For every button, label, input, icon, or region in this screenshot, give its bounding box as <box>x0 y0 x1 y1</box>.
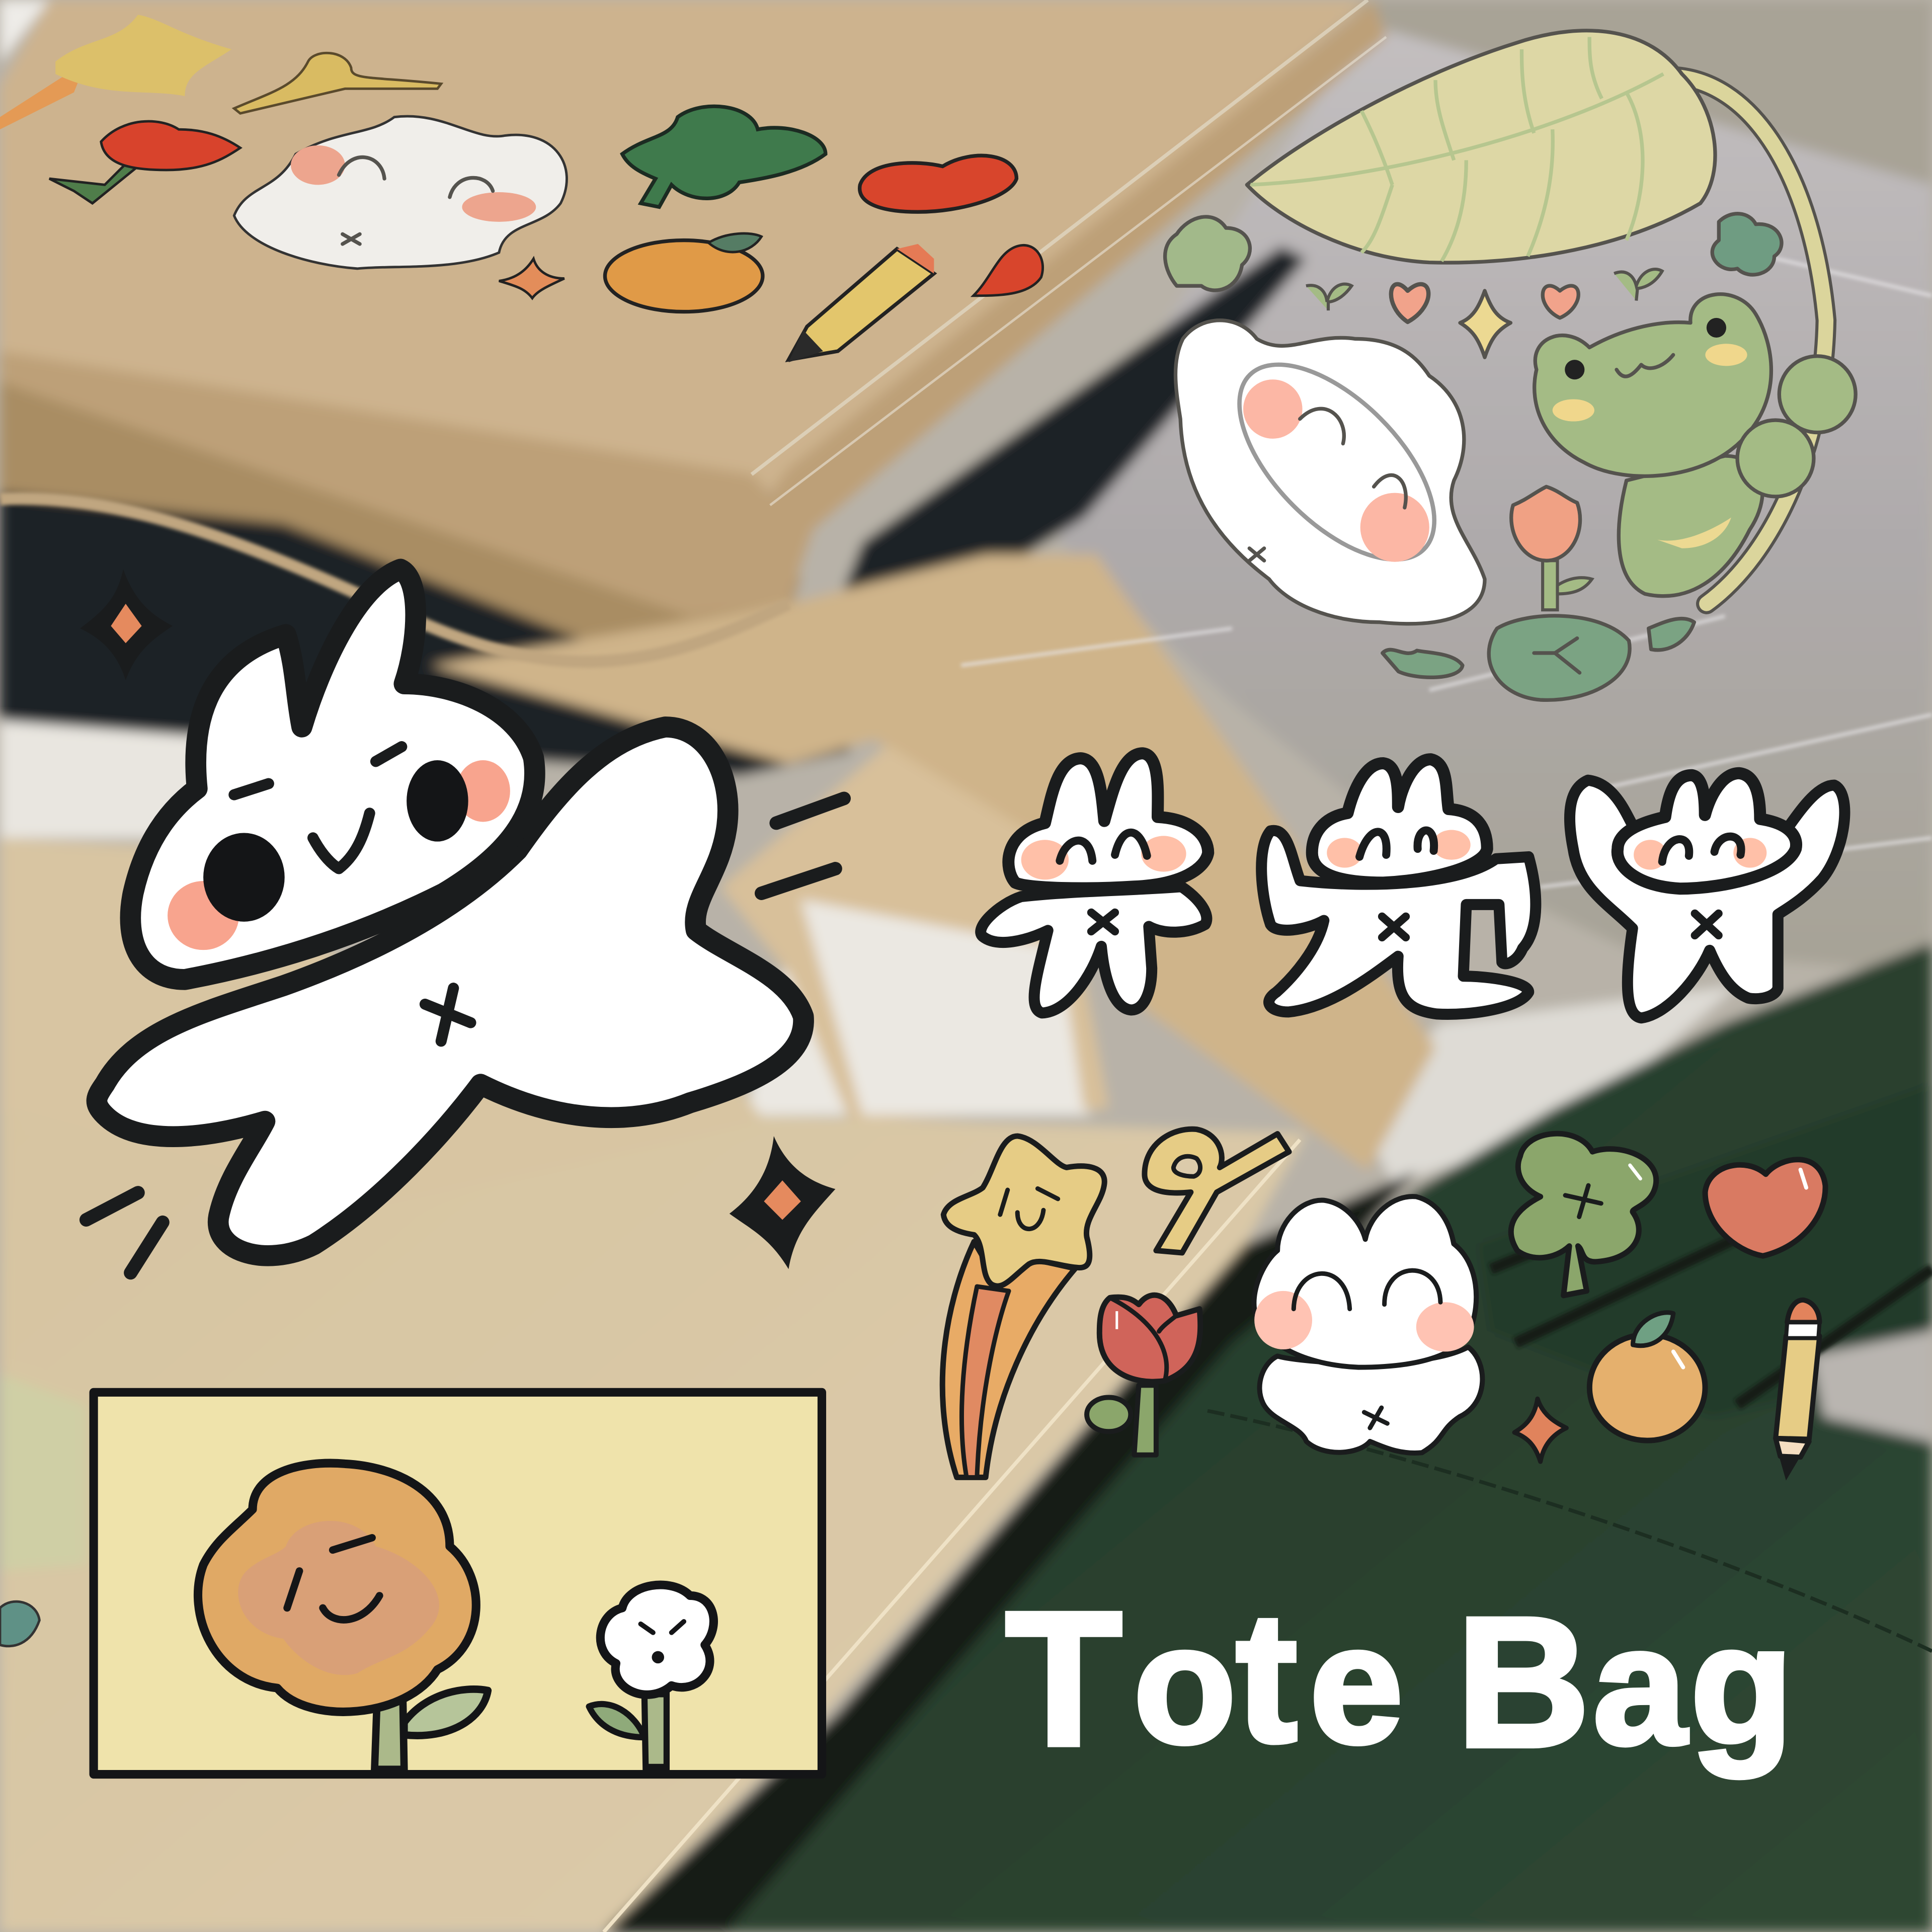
panel: flower card <box>94 1392 822 1775</box>
heading: Tote Bag: g <box>1691 1590 1793 1779</box>
icon: shooting star on bag <box>0 15 231 129</box>
icon: sprout right <box>1614 269 1662 301</box>
heading: Tote Bag: B <box>1457 1578 1590 1785</box>
icon: small clover left <box>1165 217 1250 290</box>
bunny two <box>1261 759 1536 1014</box>
icon: pencil <box>1776 1300 1819 1481</box>
icon: heart <box>1705 1160 1825 1256</box>
icon: heart right <box>1543 286 1578 318</box>
frog <box>1535 294 1856 596</box>
icon: partial teal clover at left edge <box>0 1601 39 1646</box>
tulip <box>1511 487 1592 610</box>
small pad left <box>1383 650 1463 677</box>
icon: sprouts <box>1306 284 1352 310</box>
icon: dark sparkle upper left <box>80 569 173 680</box>
icon: heart left <box>1391 284 1428 322</box>
icon: orange sparkle <box>1514 1399 1566 1462</box>
leaf <box>1247 31 1715 263</box>
icon: orange <box>1589 1313 1705 1440</box>
body <box>97 727 803 1256</box>
heading: Tote Bag: o <box>1134 1590 1236 1778</box>
icon: yellow sparkle <box>1460 291 1510 357</box>
three bunnies title figures <box>981 753 1844 1018</box>
small flower stem and leaf <box>589 1694 667 1767</box>
illustration: frog and bunny under a leaf <box>1165 31 1856 700</box>
head <box>130 569 535 980</box>
icon: sparkle on bag <box>499 259 565 298</box>
icon: shooting star <box>942 1136 1104 1477</box>
motion lines right <box>761 798 844 894</box>
lily pad <box>1489 616 1630 700</box>
motion lines left <box>86 1193 163 1273</box>
sticker group on top bag <box>0 15 1043 362</box>
icon: red fruit partial <box>974 245 1043 296</box>
bunny three <box>1570 773 1844 1018</box>
icon: clover <box>1511 1134 1656 1296</box>
icon: dark sparkle right <box>730 1136 835 1269</box>
big flower stem and leaf <box>374 1689 488 1769</box>
icon: pencil on bag <box>788 244 934 362</box>
heading: Tote Bag: e <box>1310 1590 1403 1778</box>
icon: tulip <box>1087 1295 1200 1455</box>
heading: Tote Bag: T <box>1005 1572 1122 1786</box>
icon: heart on bag <box>860 155 1016 212</box>
leaf stem <box>1663 76 1826 604</box>
icon: ribbon on bag <box>234 53 441 113</box>
icon: clover on bag <box>622 106 826 207</box>
small pad right <box>1649 619 1694 650</box>
heading: Tote Bag: t <box>1236 1573 1298 1780</box>
big flower <box>198 1463 476 1712</box>
face <box>168 747 510 950</box>
small flower <box>600 1585 713 1695</box>
belly x <box>425 988 471 1041</box>
white bunny <box>1254 1196 1482 1453</box>
icon: tulip on bag <box>49 121 240 203</box>
heading: Tote Bag <box>1005 1572 1793 1786</box>
illustration: big white bunny <box>97 569 803 1256</box>
icon: cloud bunny on bag <box>234 116 567 269</box>
icon: ribbon <box>1145 1129 1289 1253</box>
icon: orange on bag <box>605 233 763 312</box>
bunny one <box>981 753 1208 1013</box>
sticker set middle right <box>942 1129 1825 1481</box>
icon: small clover right <box>1712 214 1782 275</box>
heading: Tote Bag: a <box>1593 1591 1687 1779</box>
cloud bunny <box>1175 320 1485 624</box>
